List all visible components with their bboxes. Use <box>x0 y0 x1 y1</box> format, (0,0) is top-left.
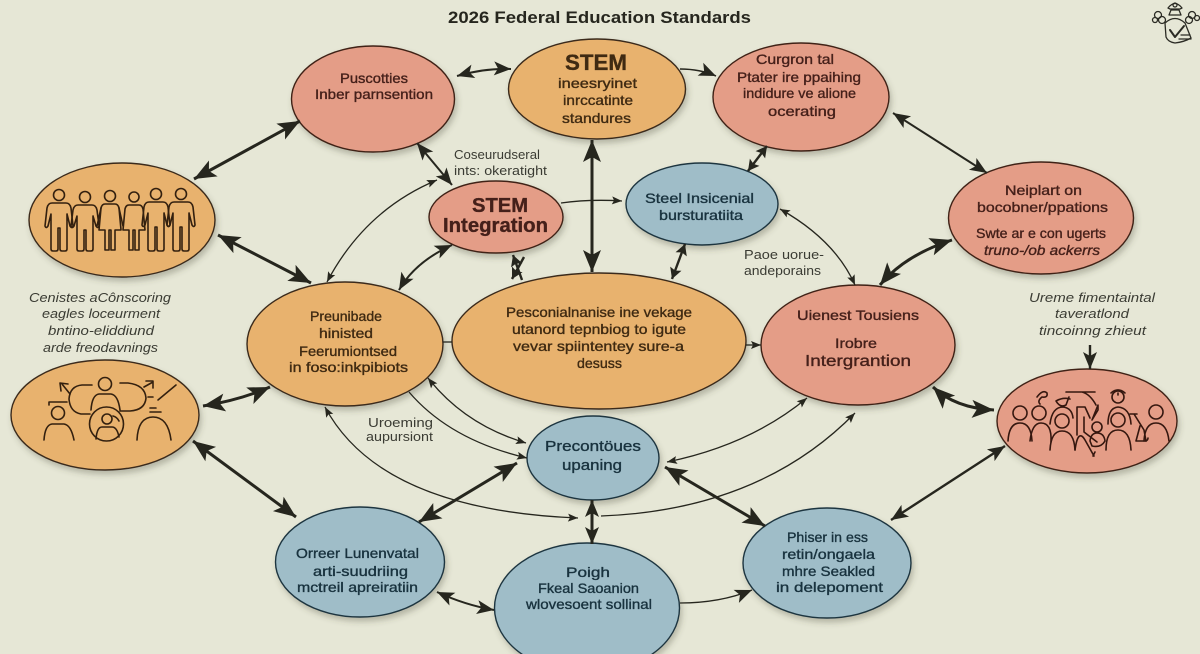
caption: Coseurudseral: Coseurudseral <box>454 147 540 162</box>
icon: crest <box>1152 3 1200 43</box>
node: Uienest Tousiens <box>761 285 955 405</box>
node: Steel Insicenial: bursturatiita <box>659 207 743 223</box>
node: Preunibade: in foso:inkpibiots <box>289 359 408 375</box>
caption: Paoe uorue: andeporains <box>744 263 822 278</box>
arrow: Uienest to Steel <box>780 209 855 285</box>
node: Neiplart on: Swte ar e con ugerts <box>976 225 1106 241</box>
node: Uienest Tousiens: Irobre <box>835 335 877 351</box>
arrow: STEM Integration to Steel <box>561 200 622 203</box>
caption: Uroeming <box>366 415 433 444</box>
node: Puscotties <box>292 46 454 152</box>
node: Preunibade: Feerumiontsed <box>299 343 397 359</box>
node: Neiplart on: Neiplart on <box>1005 182 1082 198</box>
node: Curgron tal <box>713 43 889 151</box>
node: Curgron tal: Curgron tal <box>756 51 834 67</box>
arrow: people network to Orreer <box>193 441 296 517</box>
arrow: Orreer to Poigh <box>437 592 494 610</box>
node: Orreer Lunenvatal <box>276 507 444 617</box>
caption: Uroeming: aupursiont <box>366 429 433 444</box>
node: Precontoues <box>527 416 659 500</box>
arrow: Uienest to community group <box>933 387 994 410</box>
node: Pesconialnanise: Pesconialnanise ine vekage <box>506 304 692 320</box>
arrow: Uienest to Neiplart <box>880 240 952 285</box>
caption: Coseurudseral <box>454 147 547 178</box>
arrow: people network to Preunibade <box>203 387 270 406</box>
title: 2026 Federal Education Standards <box>448 8 751 27</box>
caption: Ureme: taveratlond <box>1055 306 1130 321</box>
node: community group <box>997 369 1177 473</box>
node: Phiser in ess: retin/ongaela <box>782 546 875 562</box>
node: STEM standards: inrccatinte <box>563 92 633 108</box>
node: Precontoues: upaning <box>562 457 622 474</box>
node: Preunibade <box>247 282 443 406</box>
node: Poigh <box>494 543 680 654</box>
caption: Cenistes: Cenistes aCônscoring <box>29 290 172 305</box>
node: Neiplart on: truno-/ob ackerrs <box>984 242 1100 258</box>
node: Orreer Lunenvatal: mctreil apreiratiin <box>297 579 418 595</box>
caption: Ureme: Ureme fimentaintal <box>1029 290 1156 305</box>
caption: Coseurudseral: ints: okeratight <box>454 163 547 178</box>
node: Pesconialnanise: utanord tepnbiog to igute <box>512 321 686 337</box>
node: STEM standards <box>508 39 686 139</box>
node: Orreer Lunenvatal: Orreer Lunenvatal <box>296 545 419 561</box>
node: Uienest Tousiens: Uienest Tousiens <box>797 307 919 323</box>
caption: Paoe uorue: Paoe uorue- <box>744 247 824 262</box>
arrow: Precontoues to Phiser <box>665 467 765 526</box>
arrow: Puscotties to STEM <box>457 69 511 76</box>
arrow: Poigh to Phiser <box>680 590 752 603</box>
arrow: long curve to Uienest <box>601 413 855 516</box>
node: Poigh: wlovesoent sollinal <box>525 596 652 612</box>
caption: Cenistes: arde freodavnings <box>43 340 159 355</box>
caption: Uroeming: Uroeming <box>368 415 433 430</box>
node: Orreer Lunenvatal: arti-suudriing <box>313 563 408 579</box>
node: Pesconialnanise <box>452 273 746 409</box>
arrow: STEM vertical <box>590 140 594 272</box>
node: people network <box>11 360 199 470</box>
arrow: Preunibade to Precontoues upper <box>428 378 526 443</box>
node: Puscotties: Puscotties <box>340 70 408 86</box>
caption: Ureme <box>1029 290 1156 338</box>
arrow: people to Preunibade <box>218 235 311 283</box>
node: Phiser in ess: Phiser in ess <box>787 529 868 545</box>
node: Poigh: Poigh <box>566 564 610 580</box>
node: Curgron tal: Ptater ire ppaihing <box>737 69 861 85</box>
arrow: Pesconialnanise to Uienest <box>746 344 761 346</box>
icon: connected people <box>44 378 176 441</box>
node: Uienest Tousiens: Intergrantion <box>805 353 911 370</box>
node: Pesconialnanise: desuss <box>577 355 622 371</box>
arrow: STEM to Curgron <box>680 69 716 76</box>
caption: Paoe uorue <box>744 247 824 278</box>
connector: Preunibade to Pesconialnanise <box>443 341 452 343</box>
arrow: Precontoues to Poigh <box>590 500 594 544</box>
node: Preunibade: Preunibade <box>310 308 382 324</box>
node: Steel Insicenial <box>626 163 778 245</box>
arrow: Puscotties to STEM Integration <box>417 143 452 185</box>
arrow: Curgron to Neiplart <box>893 113 987 173</box>
node: people group <box>29 163 215 277</box>
arrow: Preunibade to Precontoues lower <box>409 392 527 458</box>
node: Phiser in ess <box>743 508 911 618</box>
icon: six people <box>45 188 195 251</box>
node: STEM standards: standures <box>562 110 631 126</box>
node: Phiser in ess: in delepoment <box>776 579 883 595</box>
node: Phiser in ess: mhre Seakled <box>782 563 875 579</box>
node: STEM standards: ineesryinet <box>558 75 637 91</box>
node: Curgron tal: indidure ve alione <box>743 85 856 101</box>
node: STEM Integration: Integration <box>443 215 548 237</box>
arrow: people to Puscotties <box>194 121 300 179</box>
arrow: Steel to Curgron <box>748 146 767 171</box>
caption: Ureme: tincoinng zhieut <box>1039 323 1148 338</box>
node: Pesconialnanise: vevar spiintentey sure-a <box>513 338 684 354</box>
node: STEM Integration <box>429 181 563 253</box>
node: Precontoues: Precontöues <box>545 438 641 455</box>
icon: crowd <box>1008 390 1169 456</box>
arrow: long curve under Preunibade <box>325 407 578 518</box>
arrow: Preunibade to STEM Integration <box>399 245 452 290</box>
arrow: Orreer to Precontoues <box>419 463 517 522</box>
node: Preunibade: hinisted <box>319 325 373 341</box>
caption: Cenistes: eagles loceurment <box>42 306 162 321</box>
arrow: Precontoues to Uienest <box>667 398 807 462</box>
arrow: Pesconialnanise to Steel <box>672 244 685 279</box>
arrow: caption to community group <box>1089 345 1091 369</box>
node: Puscotties: Inber parnsention <box>315 86 433 102</box>
node: Neiplart on <box>948 162 1134 274</box>
arrow: Phiser to community group <box>891 446 1005 520</box>
arrow: Preunibade to caption curve <box>327 180 437 282</box>
node: STEM standards: STEM <box>565 50 627 75</box>
node: Curgron tal: ocerating <box>768 103 836 119</box>
node: Neiplart on: bocobner/ppations <box>977 199 1108 215</box>
node: Poigh: Fkeal Saoanion <box>538 580 639 596</box>
caption: Cenistes <box>29 290 172 355</box>
node: STEM Integration: STEM <box>472 195 528 217</box>
arrow: STEM Integration to Pesconialnanise <box>512 255 524 280</box>
node: Steel Insicenial: Steel Insicenial <box>645 190 754 206</box>
caption: Cenistes: bntino-eliddiund <box>48 323 155 338</box>
